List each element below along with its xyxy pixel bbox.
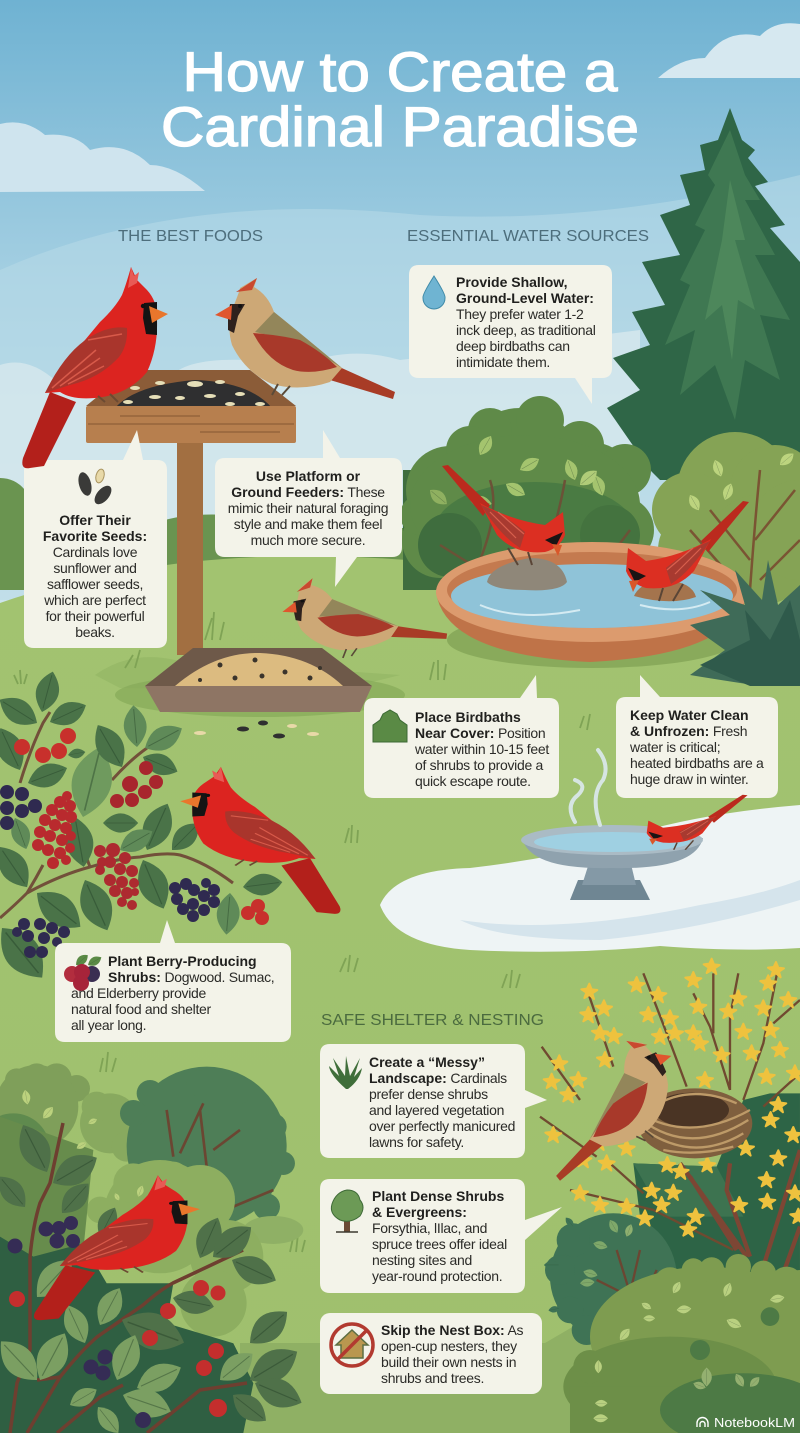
callout: birdbaths near cover: Near Cover: Position [415,725,545,741]
callout: favorite seeds: beaks. [75,624,115,640]
title [161,40,639,158]
callout: berry shrubs: all year long. [71,1017,146,1033]
cardinal: male on feeder [22,267,168,468]
berries in upper left [14,728,269,925]
steam [571,750,606,825]
icon: grass [329,1056,362,1089]
forsythia, dark foliage and branches [540,959,800,1345]
callout: shallow water: Provide Shallow, [456,274,568,290]
callout: keep water clean: huge draw in winter. [630,771,749,787]
birdbath: terracotta [436,542,748,668]
shrub: bottom right [563,1254,800,1433]
title: How to Create a [182,40,618,103]
red berry bunch left [32,791,77,869]
callout: skip the nest box: build their own nests in [381,1354,516,1370]
callout: birdbaths near cover: quick escape route. [415,773,531,789]
callout: favorite seeds: sunflower and [53,560,137,576]
callout: berry shrubs: natural food and shelter [71,1001,212,1017]
callout: dense shrubs: spruce trees offer ideal [372,1236,507,1252]
callout: birdbaths near cover: of shrubs to provide a [415,757,544,773]
icon: no nest box [331,1324,373,1366]
callout: platform feeders: Use Platform or [256,468,361,484]
callout: messy landscape: over perfectly manicured [369,1118,515,1134]
callout: shallow water: Ground-Level Water: [456,290,594,306]
icon: seeds [76,468,115,507]
cardinal: drinking left [442,465,565,565]
callout: favorite seeds [24,430,167,648]
cloud: top left [0,122,205,192]
bottom-left branches [10,1123,247,1433]
callout: messy landscape: and layered vegetation [369,1102,504,1118]
callout: keep water clean: & Unfrozen: Fresh [630,723,747,739]
callout: platform feeders: mimic their natural foraging [228,500,388,516]
callout: keep water clean: heated birdbaths are a [630,755,764,771]
rock right [634,580,696,601]
snow patch [380,805,800,952]
callout: skip the nest box [320,1313,542,1394]
nest [638,1088,752,1158]
callout: skip the nest box: open-cup nesters, they [381,1338,517,1354]
callout: shallow water: intimidate them. [456,354,550,370]
callout: messy landscape: prefer dense shrubs [369,1086,488,1102]
title: Cardinal Paradise [161,95,639,158]
platform feeder [86,370,296,443]
shrub: behind birdbath [400,396,654,600]
feeder post [177,443,203,655]
shrub: right light green [652,432,800,605]
callout: shallow water [409,265,612,404]
background: sky [0,0,800,620]
ground feeder [115,648,405,717]
callout: shallow water: deep birdbaths can [456,338,570,354]
icon: berries [64,952,103,991]
callout: keep water clean [616,675,778,798]
callout: favorite seeds: Offer Their [59,512,131,528]
heading: the best foods: THE BEST FOODS [118,228,263,245]
icon: water drop [423,276,445,309]
logo: NotebookLM: NotebookLM [714,1415,795,1430]
grass tufts [14,612,590,1252]
callout: keep water clean: water is critical; [629,739,720,755]
callout: favorite seeds: for their powerful [46,608,145,624]
cloud: mid level haze [0,330,640,560]
callout: platform feeders: Ground Feeders: These [231,484,385,500]
winter birdbath [521,750,703,900]
callout: messy landscape [320,1044,547,1158]
callout: keep water clean: Keep Water Clean [630,707,749,723]
cardinal: drinking right [626,501,749,601]
callout: dense shrubs: & Evergreens: [372,1204,467,1220]
bottom-left berries [8,1216,227,1428]
callout: dense shrubs: Forsythia, lIlac, and [372,1220,487,1236]
callout: messy landscape: Landscape: Cardinals [369,1070,507,1086]
callout: favorite seeds: which are perfect [43,592,146,608]
callout: platform feeders [215,430,402,587]
hills [0,478,420,600]
dark berries [0,785,220,958]
red berry bunch right [94,843,139,910]
callout: berry shrubs: Plant Berry-Producing [108,953,257,969]
rock left [487,558,567,590]
callout: messy landscape: lawns for safety. [369,1134,464,1150]
callout: favorite seeds: Cardinals love [53,544,138,560]
icon: shrub [373,710,407,742]
cardinal: female on feeder [215,278,395,399]
callout: berry shrubs: Shrubs: Dogwood. Sumac, [108,969,274,985]
callout: birdbaths near cover [364,675,559,798]
cardinal: female on ground feeder [277,553,448,671]
callout: dense shrubs [320,1179,562,1293]
callout: dense shrubs: year-round protection. [372,1268,502,1284]
callout: berry shrubs: and Elderberry provide [71,985,207,1001]
callout: berry shrubs [55,920,291,1042]
icon: tree [331,1190,363,1232]
dark shrub lower left [544,1213,677,1345]
heading: essential water sources: ESSENTIAL WATER SOURCES [407,228,649,245]
callout: favorite seeds: safflower seeds, [47,576,143,592]
spruce tree [607,108,800,480]
callout: birdbaths near cover: water within 10-15 feet [414,741,549,757]
flowers [544,959,800,1237]
branches [540,967,800,1273]
lawn shadow patches [95,657,400,690]
callout: favorite seeds: Favorite Seeds: [43,528,147,544]
callout: shallow water: They prefer water 1-2 [456,306,584,322]
callout: birdbaths near cover: Place Birdbaths [415,709,521,725]
callout: platform feeders: style and make them feel [234,516,382,532]
callout: skip the nest box: Skip the Nest Box: As [381,1322,524,1338]
callout: dense shrubs: nesting sites and [372,1252,472,1268]
dark spiky plant [690,560,800,686]
callout: dense shrubs: Plant Dense Shrubs [372,1188,504,1204]
cloud: top right [658,23,800,78]
lawn [0,556,800,1433]
scattered seeds [194,720,319,738]
cardinal: female by nest [518,1027,699,1181]
berry shrub [0,669,284,989]
heading: safe shelter and nesting: SAFE SHELTER & NESTING [321,1012,544,1029]
callout: skip the nest box: shrubs and trees. [381,1370,484,1386]
cardinal: winter [647,795,748,850]
cardinal: male in bottom-left shrub [34,1175,200,1320]
snow shading [460,880,800,940]
cardinal: male on berry branch [180,767,340,914]
callout: platform feeders: much more secure. [251,532,365,548]
callout: messy landscape: Create a “Messy” [369,1054,485,1070]
sky band: lighter haze [0,175,800,600]
bottom-left leaves [0,1118,307,1430]
lower lawn band [240,1305,610,1433]
callout: shallow water: inck deep, as traditional [456,322,596,338]
shrubs: bottom left [0,1063,303,1433]
